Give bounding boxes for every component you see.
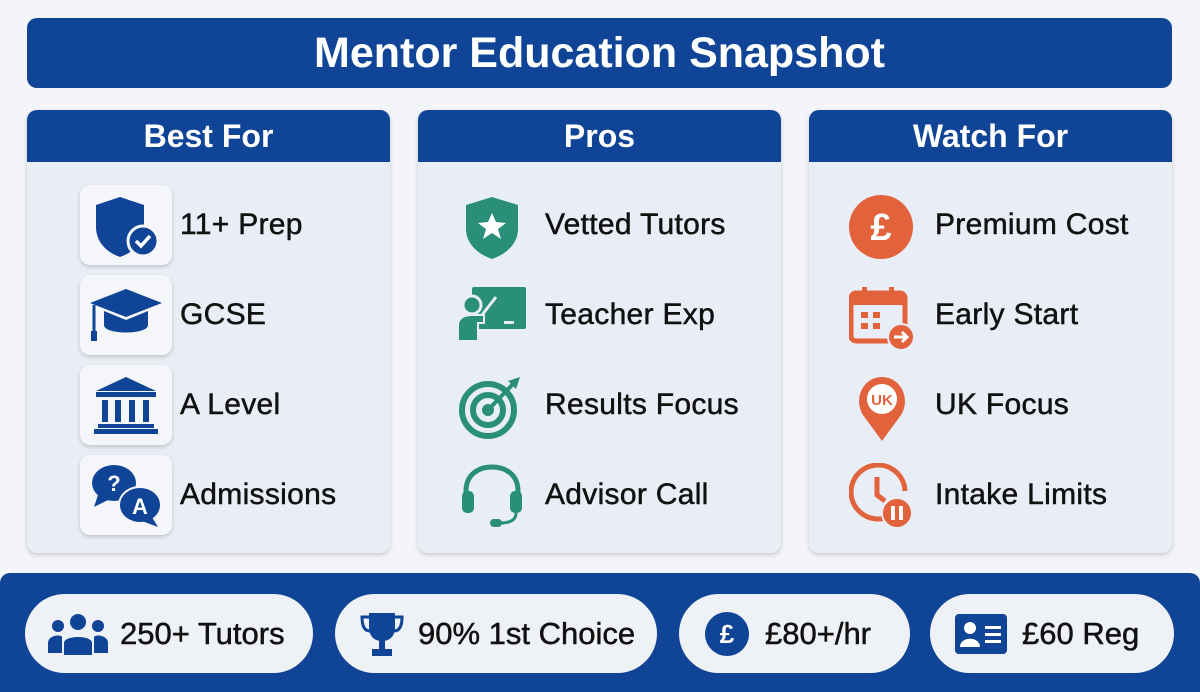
item: results focus bbox=[459, 377, 739, 439]
item: admissions bbox=[78, 455, 336, 539]
panel: best for bbox=[27, 110, 390, 553]
stat: registration: £60 Reg bbox=[1022, 616, 1139, 651]
item: admissions: ? bbox=[107, 471, 121, 496]
stat: tutors bbox=[25, 594, 313, 673]
stat: 1st choice bbox=[335, 594, 657, 673]
stat: 1st choice: 90% 1st Choice bbox=[418, 616, 635, 651]
heading: watch for: Watch For bbox=[913, 118, 1068, 154]
item: uk focus: UK bbox=[871, 392, 893, 409]
stat: hourly rate: £ bbox=[720, 619, 735, 649]
item: admissions: Admissions bbox=[180, 478, 336, 511]
heading: best for: Best For bbox=[144, 118, 273, 154]
item: intake limits bbox=[849, 463, 1107, 527]
stat: registration bbox=[930, 594, 1174, 673]
stat: tutors: 250+ Tutors bbox=[120, 616, 285, 651]
item: a level: A Level bbox=[180, 388, 281, 421]
bottom stats bar bbox=[0, 573, 1200, 692]
item: premium cost: £ bbox=[870, 207, 892, 249]
item: gcse: GCSE bbox=[180, 298, 266, 331]
item: uk focus bbox=[859, 377, 1069, 441]
heading: best for bbox=[27, 110, 390, 162]
item: vetted tutors: Vetted Tutors bbox=[545, 208, 726, 241]
item: advisor call bbox=[462, 464, 709, 527]
item: premium cost: Premium Cost bbox=[935, 208, 1129, 241]
title bbox=[27, 18, 1172, 88]
item: early start: Early Start bbox=[935, 298, 1078, 331]
item: vetted tutors bbox=[466, 197, 726, 259]
item: a level bbox=[78, 365, 281, 449]
heading: pros bbox=[418, 110, 781, 162]
item: teacher exp: Teacher Exp bbox=[545, 298, 715, 331]
item: advisor call: Advisor Call bbox=[545, 478, 709, 511]
item: 11+ prep bbox=[78, 185, 303, 269]
item: teacher exp bbox=[459, 287, 715, 340]
title: Mentor Education Snapshot bbox=[314, 29, 885, 77]
panel: watch for bbox=[809, 110, 1172, 553]
heading: watch for bbox=[809, 110, 1172, 162]
heading: pros: Pros bbox=[564, 118, 635, 154]
item: results focus: Results Focus bbox=[545, 388, 739, 421]
item: 11+ prep: 11+ Prep bbox=[180, 208, 303, 241]
item: intake limits: Intake Limits bbox=[935, 478, 1107, 511]
stat: hourly rate: £80+/hr bbox=[765, 616, 871, 651]
item: admissions: A bbox=[132, 494, 148, 519]
stat: hourly rate bbox=[679, 594, 910, 673]
item: gcse bbox=[78, 275, 266, 359]
item: early start bbox=[849, 287, 1078, 349]
panel: pros bbox=[418, 110, 781, 553]
item: premium cost bbox=[849, 195, 1129, 259]
item: uk focus: UK Focus bbox=[935, 388, 1069, 421]
